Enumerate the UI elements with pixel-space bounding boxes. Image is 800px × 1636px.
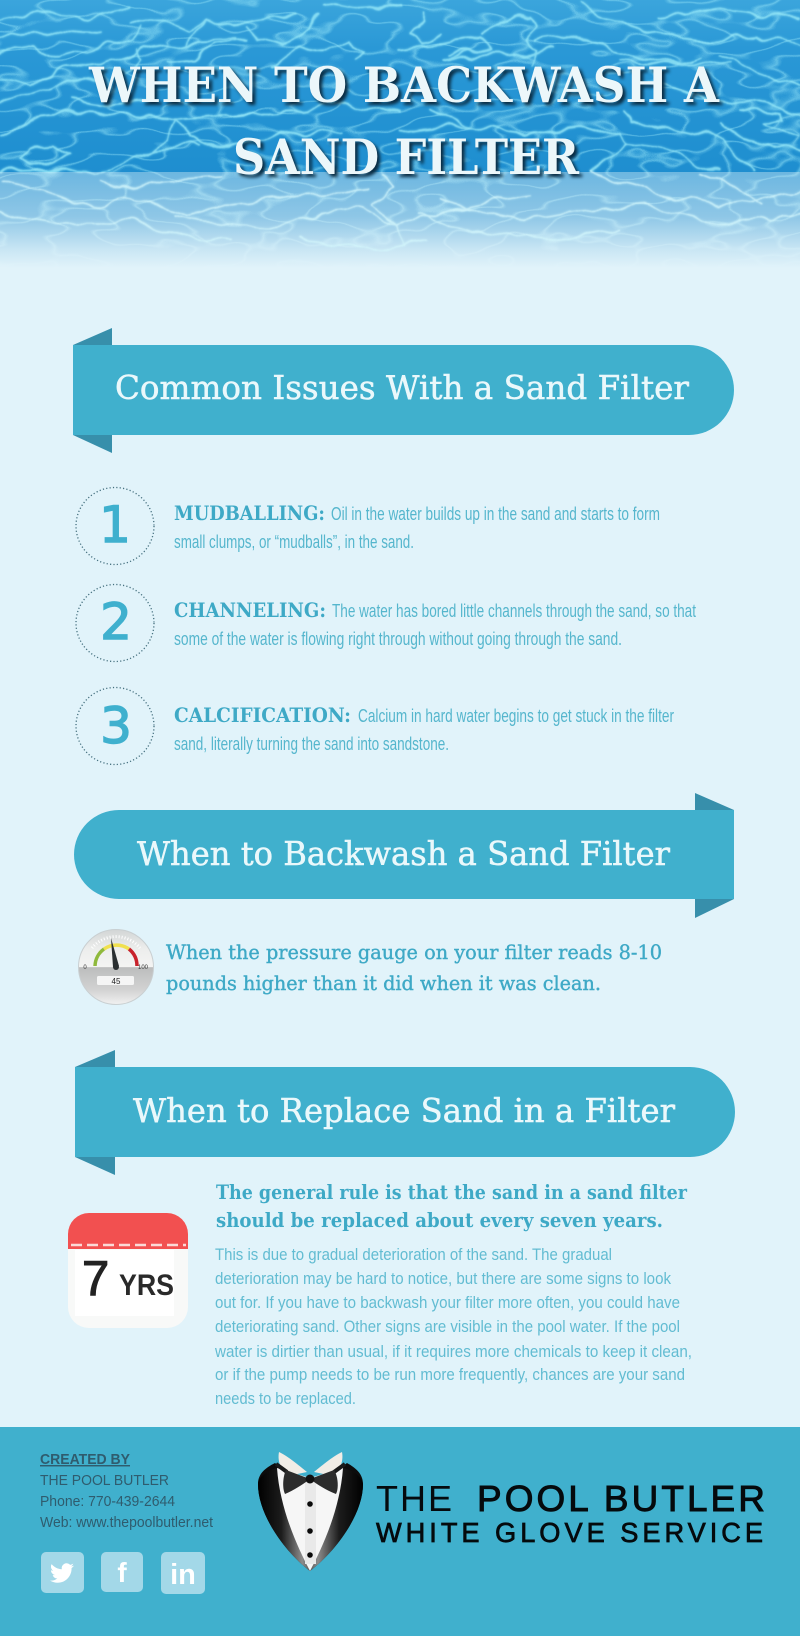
logo wordmark: POOL BUTLER [477,1478,768,1519]
logo wordmark [376,1478,768,1548]
contact details: THE POOL BUTLER [40,1473,169,1489]
icon: linkedin [161,1552,205,1594]
logo wordmark: WHITE GLOVE SERVICE [376,1517,767,1548]
issue 3: calcification: 3 [100,697,132,755]
replace heading [216,1180,687,1232]
issue 1: mudballing: small clumps, or “mudballs”, in the sand. [174,532,414,552]
title [88,56,720,186]
banner heading: When to Replace Sand in a Filter [133,1091,675,1130]
contact details [40,1452,213,1531]
issue 2: channeling: 2 [100,593,132,651]
replace paragraph: or if the pump needs to be run more frequently, chances are your sand [215,1365,685,1384]
issue 1: mudballing [76,488,660,564]
banner heading: When to Backwash a Sand Filter [137,834,670,873]
banner: common issues [73,328,734,453]
water header image [0,0,800,272]
title: WHEN TO BACKWASH A [88,56,720,114]
issue 3: calcification: CALCIFICATION: [174,703,351,727]
icon: linkedin: in [170,1559,196,1591]
banner: when to replace [75,1050,735,1175]
logo wordmark: THE [376,1478,454,1519]
icon: pressure gauge: 45 [112,977,121,986]
icon: pressure gauge [78,930,154,1004]
icon: calendar 7 yrs: 7 [82,1252,109,1306]
replace paragraph: needs to be replaced. [215,1389,356,1408]
icon: twitter [41,1552,84,1593]
issue 1: mudballing: MUDBALLING: [174,501,325,525]
issue 2: channeling: some of the water is flowing right through without going through the sand. [174,629,622,649]
replace paragraph: out for. If you have to backwash your filter more often, you could have [215,1293,680,1312]
contact details: CREATED BY [40,1452,130,1468]
banner heading: Common Issues With a Sand Filter [115,368,689,407]
icon: calendar 7 yrs [68,1213,188,1328]
replace paragraph: deteriorating sand. Other signs are visible in the pool water. If the pool [215,1317,680,1336]
banner: when to backwash [74,793,734,918]
title: SAND FILTER [233,128,580,186]
footer panel [0,1427,800,1636]
issue 2: channeling [76,584,696,662]
icon: pressure gauge: 100 [138,965,149,971]
contact details: Web: www.thepoolbutler.net [40,1515,213,1531]
issue 3: calcification [76,688,674,764]
issue 1: mudballing: Oil in the water builds up in the sand and starts to form [331,504,660,524]
icon: facebook: f [117,1557,127,1588]
gauge text: When the pressure gauge on your filter reads 8-10 [166,940,662,964]
issue 2: channeling: CHANNELING: [174,598,326,622]
logo: tuxedo [258,1452,363,1571]
replace paragraph: deterioration may be hard to notice, but there are some signs to look [215,1269,671,1288]
replace heading: should be replaced about every seven years. [216,1208,663,1232]
icon: calendar 7 yrs: YRS [119,1269,174,1302]
issue 3: calcification: sand, literally turning the sand into sandstone. [174,734,449,754]
icon: pressure gauge: 0 [83,965,87,971]
replace heading: The general rule is that the sand in a sand filter [216,1180,687,1204]
issue 3: calcification: Calcium in hard water begins to get stuck in the filter [358,706,674,726]
gauge text: pounds higher than it did when it was clean. [166,971,601,995]
replace paragraph: water is dirtier than usual, if it requires more chemicals to keep it clean, [214,1342,692,1361]
issue 1: mudballing: 1 [99,496,131,554]
replace paragraph [214,1245,692,1408]
gauge text [166,940,662,995]
replace paragraph: This is due to gradual deterioration of the sand. The gradual [215,1245,612,1264]
contact details: Phone: 770-439-2644 [40,1494,175,1510]
icon: facebook [101,1552,143,1592]
